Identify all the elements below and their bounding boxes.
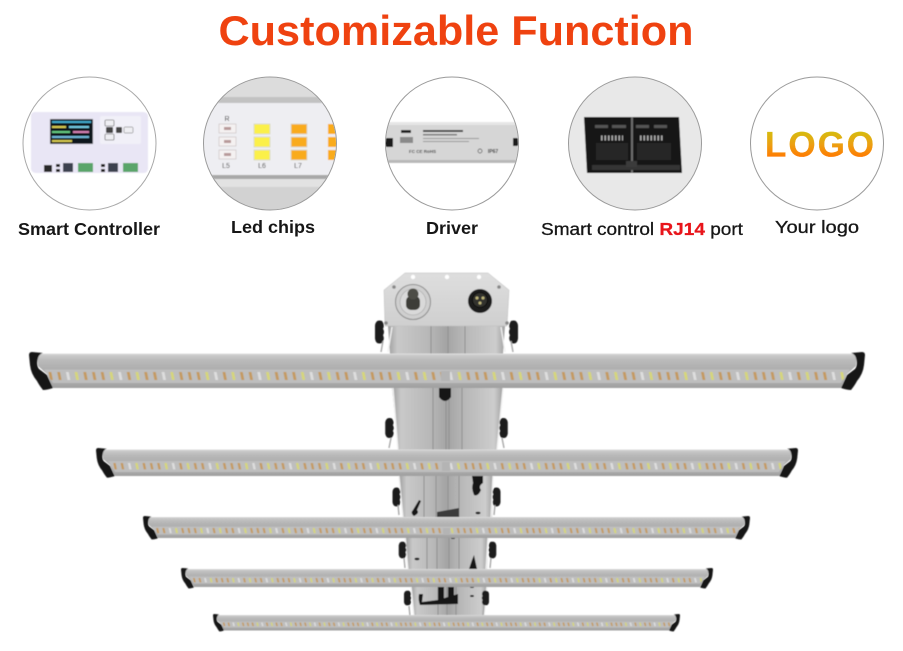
mounting plate bbox=[384, 273, 509, 326]
icon: driver photo bbox=[386, 122, 518, 164]
label: Smart Controller bbox=[18, 219, 160, 239]
dimmer knob bbox=[396, 284, 430, 320]
panel: your logo bbox=[750, 77, 884, 237]
icon: driver photo: FC CE RoHS bbox=[409, 149, 436, 154]
icon: led chips photo: L7 bbox=[294, 163, 302, 170]
icon: smart controller photo bbox=[31, 112, 148, 173]
light bar 1 bbox=[29, 352, 865, 390]
icon: driver photo: IP67 bbox=[488, 149, 498, 155]
label: Your logo bbox=[775, 217, 859, 237]
panel: driver bbox=[385, 77, 518, 238]
label: Led chips bbox=[231, 217, 315, 237]
icon: rj14 port photo bbox=[568, 77, 702, 210]
power connector bbox=[468, 289, 492, 313]
panel: rj14 port bbox=[541, 77, 743, 239]
light bar 2 bbox=[96, 448, 798, 478]
cables bbox=[412, 388, 483, 605]
icon: led chips photo bbox=[203, 77, 340, 210]
icon: led chips photo: L6 bbox=[258, 163, 266, 170]
circle outline bbox=[386, 77, 518, 210]
circle outline bbox=[750, 77, 884, 210]
circle outline bbox=[23, 77, 156, 210]
icon: led chips photo: R bbox=[224, 116, 230, 123]
circle outline bbox=[204, 77, 336, 210]
icon: led chips photo: L5 bbox=[222, 163, 230, 170]
grow light fixture bbox=[29, 273, 865, 631]
light bar 5 bbox=[213, 614, 680, 631]
light bar 4 bbox=[181, 568, 713, 589]
circle outline bbox=[568, 77, 702, 210]
bracket sections bbox=[388, 326, 505, 617]
panel: smart controller bbox=[18, 77, 160, 239]
title: Customizable Function bbox=[218, 7, 694, 54]
adjustment knobs bbox=[375, 320, 518, 616]
label: Smart control RJ14 port bbox=[541, 219, 743, 239]
label: Driver bbox=[426, 218, 478, 238]
light bar 3 bbox=[143, 516, 750, 540]
logo text: LOGO bbox=[765, 126, 874, 164]
panel: led chips bbox=[203, 77, 340, 237]
